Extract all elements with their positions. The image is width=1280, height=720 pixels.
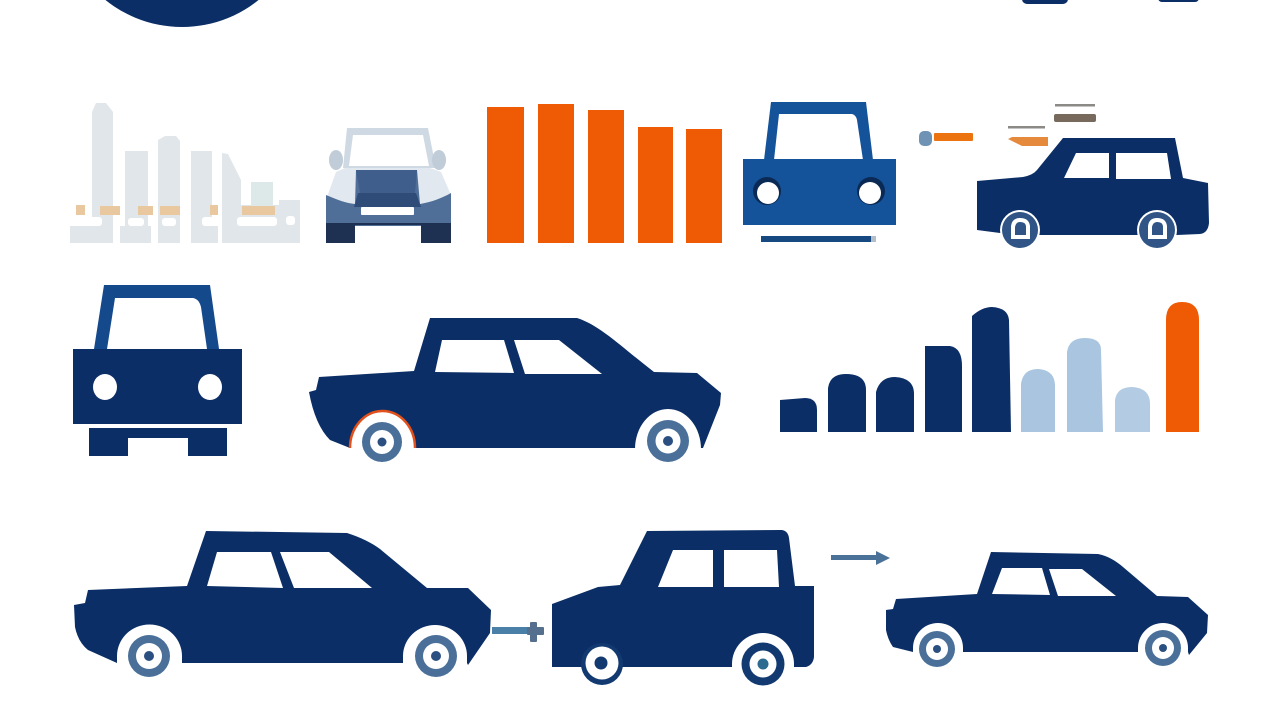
- wheel: bottom right car front: [1145, 630, 1181, 666]
- orange rim stroke: [350, 411, 415, 448]
- wheel: centre car rear: [362, 422, 402, 462]
- icon: cropped wheels at top right: [1022, 0, 1199, 4]
- wheel: bottom left car front: [415, 635, 457, 677]
- wheel arches: [117, 625, 182, 664]
- icon: tow connector between cars: [492, 622, 544, 642]
- icon: speed lines above car: [1008, 104, 1096, 146]
- icon: pale city skyline: [70, 103, 300, 243]
- bar chart: orange bars: [487, 104, 722, 243]
- wheel: bottom centre car front: [742, 642, 784, 686]
- icon: orange motion dash with dot: [919, 131, 973, 146]
- wheel: centre car front: [647, 420, 689, 462]
- wheel: bottom left car rear: [128, 635, 170, 677]
- icon: blue front-view car: [743, 102, 896, 242]
- icon: navy front-view car, middle left: [73, 285, 242, 456]
- icon: navy side-view car, bottom right: [886, 552, 1208, 667]
- icon: large navy side-view car, centre: [309, 318, 721, 462]
- wheel: upper right car rear: [1000, 210, 1040, 250]
- icon: cropped circle at top: [60, 0, 304, 27]
- wheel: bottom right car rear: [919, 631, 955, 667]
- icon: grey front-view car: [326, 128, 451, 243]
- arrow: pointing right: [831, 551, 890, 565]
- icon: large navy side-view car, bottom left: [74, 531, 491, 677]
- icon: navy side-view car, upper right: [977, 138, 1209, 250]
- wheel: bottom centre car rear: [581, 643, 623, 685]
- icon: boxy navy side-view car, bottom centre: [552, 530, 814, 686]
- wheel: upper right car front: [1137, 210, 1177, 250]
- wheel arches: [913, 623, 963, 654]
- wheel arch with orange rim: [350, 412, 415, 449]
- bar chart: navy, light blue and orange rounded bars: [780, 302, 1199, 432]
